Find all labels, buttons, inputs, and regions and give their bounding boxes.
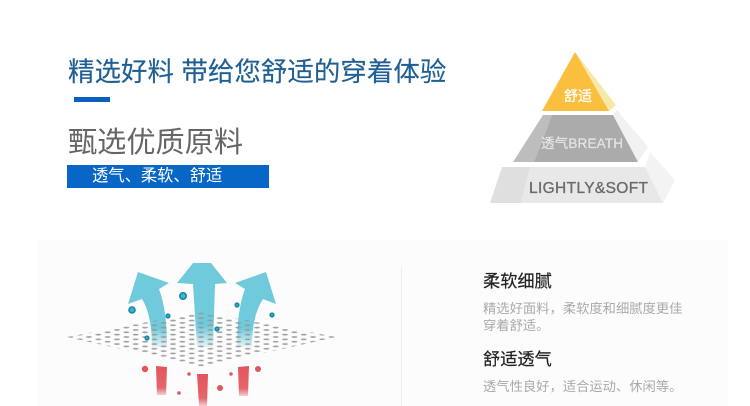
subheading: 甄选优质原料 [68, 127, 243, 159]
pyramid middle tier: 透气BREATH [541, 136, 623, 151]
title underline [74, 97, 110, 102]
feature: soft description: 穿着舒适。 [483, 318, 549, 333]
blue arrow centre [177, 263, 227, 347]
red bars [156, 366, 249, 406]
blue particles [129, 293, 274, 340]
blue label bar [67, 165, 269, 188]
feature: soft description [483, 301, 682, 333]
panel: bottom background [37, 240, 728, 406]
label text: 透气、柔软、舒适 [92, 167, 222, 185]
red particles [142, 366, 261, 395]
pyramid top tier: 舒适 [564, 88, 592, 104]
pyramid bottom tier [490, 152, 675, 203]
pyramid middle tier [513, 110, 648, 162]
feature: soft heading: 柔软细腻 [483, 271, 552, 291]
vertical divider [401, 267, 402, 406]
blue arrow left [128, 272, 169, 347]
feature: soft description: 精选好面料，柔软度和细腻度更佳 [483, 301, 682, 316]
fabric mesh [67, 312, 336, 367]
blue arrow right [235, 272, 276, 347]
feature: breathable heading: 舒适透气 [483, 349, 552, 369]
feature: breathable description: 透气性良好，适合运动、休闲等。 [483, 379, 682, 394]
title: 精选好料 带给您舒适的穿着体验 [68, 57, 446, 87]
pyramid top tier [542, 52, 616, 111]
pyramid bottom tier: LIGHTLY&SOFT [529, 180, 649, 197]
